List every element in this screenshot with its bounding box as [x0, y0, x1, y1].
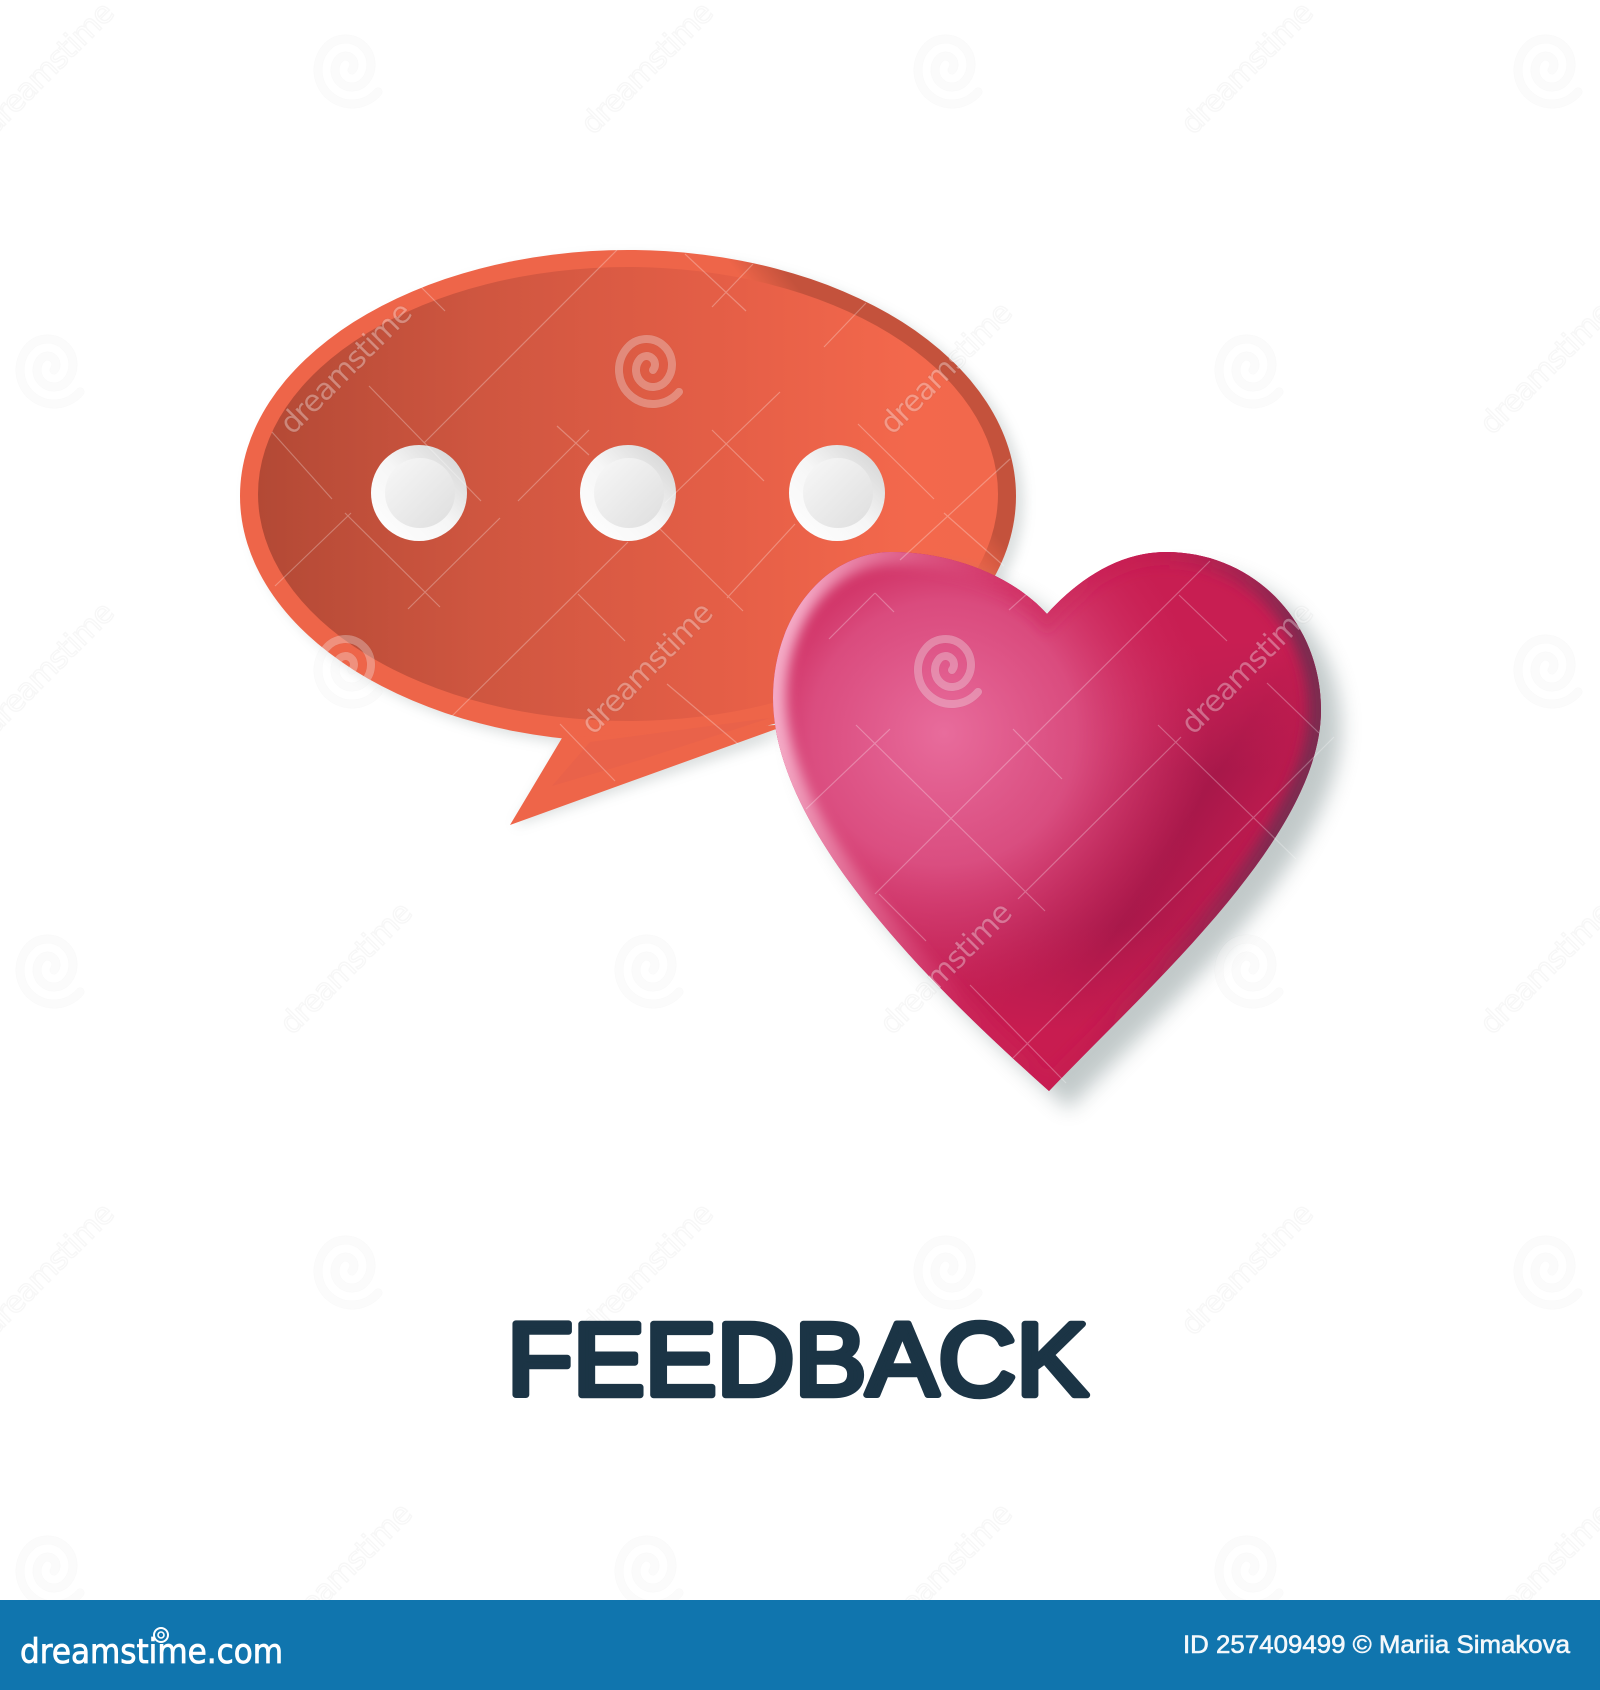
watermark: dreamstime text: dreamstime: [273, 295, 419, 441]
footer logo: dreamstime.com: [20, 1632, 283, 1672]
watermark: dreamstime text: dreamstime: [273, 1496, 419, 1642]
dot 2: [580, 445, 676, 541]
watermark: dreamstime text: dreamstime: [873, 295, 1019, 441]
bubble shadow: [248, 256, 1024, 826]
watermark: dreamstime text: dreamstime: [574, 1196, 720, 1342]
typing dots: [371, 445, 885, 541]
watermark: dreamstime text: dreamstime: [1174, 595, 1320, 741]
watermark: hairline crosses: [272, 250, 1334, 1083]
icon: heart: [760, 540, 1341, 1109]
watermark: dreamstime text: dreamstime: [273, 895, 419, 1041]
bubble inner face: [258, 267, 998, 786]
heart body: [760, 540, 1340, 1100]
watermark: dreamstime text: dreamstime: [574, 595, 720, 741]
dot 1: [371, 445, 467, 541]
bubble outline shape: [240, 250, 1016, 825]
watermark: dreamstime text: dreamstime: [873, 1496, 1019, 1642]
title: FEEDBACK: [507, 1302, 1088, 1417]
heart shadow: [793, 570, 1341, 1109]
icon: speech bubble: [240, 250, 1024, 826]
footer bar: [0, 1600, 1600, 1690]
dot 3: [789, 445, 885, 541]
watermark: dreamstime text: dreamstime: [1174, 1196, 1320, 1342]
footer credit: ID 257409499 © Mariia Simakova: [1183, 1631, 1570, 1659]
watermark: dreamstime text: dreamstime: [873, 895, 1019, 1041]
